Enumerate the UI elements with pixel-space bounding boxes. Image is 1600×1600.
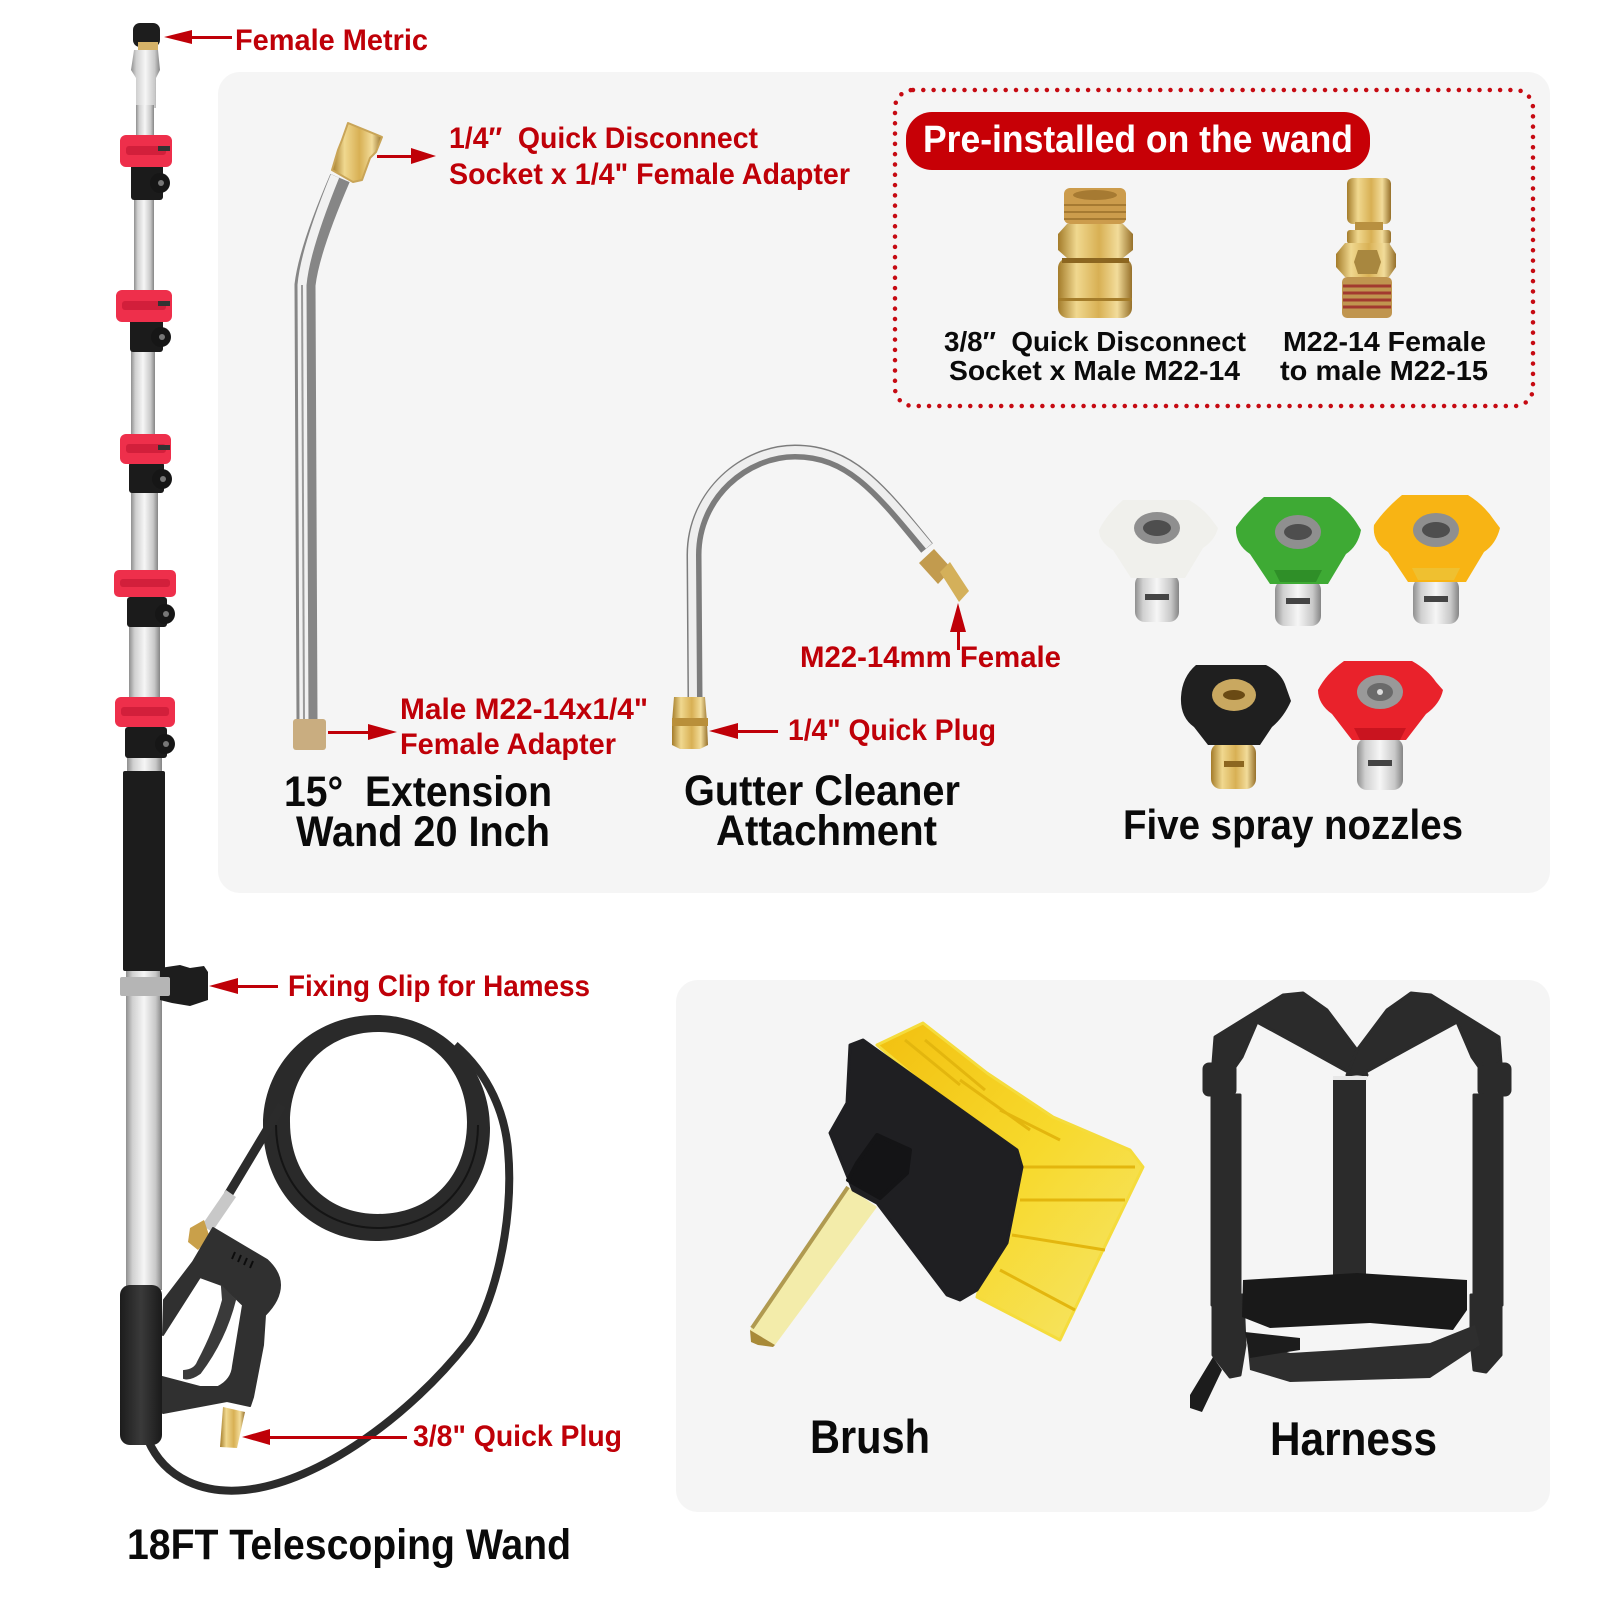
- pill text: Pre-installed on the wand: [923, 119, 1353, 161]
- rod: [305, 178, 340, 720]
- clamp 2: [116, 290, 172, 352]
- brass socket: [672, 697, 708, 749]
- right side: [1347, 993, 1510, 1372]
- rod: [750, 1187, 877, 1345]
- belt buckle: [1245, 1332, 1300, 1358]
- clamp 3: [120, 434, 172, 493]
- centre ring: [1333, 1076, 1367, 1080]
- bristles: [877, 1023, 1143, 1340]
- label: socket: Socket x Male M22-14: [949, 355, 1240, 386]
- gun vents: [232, 1252, 253, 1268]
- arrow: fixing clip: [209, 978, 278, 994]
- tube sections: [136, 105, 154, 137]
- label: socket: [944, 326, 1246, 386]
- caption: extension wand: [284, 768, 552, 856]
- brass socket: [332, 123, 382, 182]
- clamp 4: [114, 570, 176, 627]
- gun trigger: [184, 1287, 235, 1378]
- brass quick plug: [220, 1407, 245, 1448]
- tube highlight: [692, 450, 929, 698]
- rod centre line: [302, 285, 304, 720]
- clamp 5: [115, 697, 175, 758]
- label: fixing clip: Fixing Clip for Hamess: [288, 970, 590, 1003]
- arrow: female metric: [164, 30, 232, 44]
- label: quarter-inch socket: 1/4″ Quick Disconnect: [449, 122, 758, 155]
- tube: [694, 452, 927, 698]
- hose coil: [263, 1015, 490, 1241]
- caption: gutter cleaner: Attachment: [716, 807, 937, 855]
- coil winding line: [276, 1125, 478, 1228]
- label: quarter-inch socket: Socket x 1/4" Female Adapter: [449, 158, 850, 191]
- left side: [1204, 993, 1367, 1377]
- end fitting: [919, 549, 969, 602]
- caption: gutter cleaner: Gutter Cleaner: [684, 767, 960, 815]
- caption: telescoping wand: 18FT Telescoping Wand: [127, 1521, 571, 1569]
- brass ring: [138, 42, 158, 51]
- hose to gun: [228, 1105, 282, 1195]
- foam grip: [123, 771, 165, 971]
- arrow: quick plug: [709, 723, 778, 739]
- label: plug: M22-14 Female: [1283, 326, 1486, 357]
- caption: extension wand: Wand 20 Inch: [296, 808, 550, 856]
- label: quick plug: 3/8" Quick Plug: [413, 1420, 622, 1453]
- hanging buckle: [1190, 1357, 1222, 1412]
- pill heading: [906, 112, 1370, 170]
- caption: gutter cleaner: [684, 767, 960, 855]
- nozzle: yellow: [1374, 495, 1500, 624]
- caption: extension wand: 15° Extension: [284, 768, 552, 816]
- caption: nozzles: Five spray nozzles: [1123, 801, 1463, 848]
- nozzle: black: [1181, 665, 1291, 789]
- hose long loop: [148, 1045, 509, 1491]
- panel: brush and harness: [676, 980, 1550, 1512]
- dotted border: [895, 90, 1533, 406]
- gun swivel fitting: [202, 1190, 236, 1232]
- spray gun body: [162, 1228, 280, 1413]
- brush: [750, 1023, 1143, 1347]
- label: plug: [1280, 326, 1488, 386]
- label: m22 female: M22-14mm Female: [800, 641, 1061, 674]
- silver band: [120, 977, 170, 996]
- top knob: [133, 23, 160, 47]
- fitting: quick disconnect socket: [1058, 188, 1133, 318]
- label: male adapter: Female Adapter: [400, 728, 616, 761]
- bottom grip: [120, 1285, 162, 1445]
- label: socket: 3/8″ Quick Disconnect: [944, 326, 1246, 357]
- rod highlight: [302, 176, 335, 720]
- clamp 1: [120, 135, 172, 200]
- gun brass inlet: [188, 1220, 210, 1250]
- nozzle: white: [1099, 500, 1218, 622]
- bristle shading: [905, 1040, 1135, 1310]
- nozzle: red: [1318, 661, 1443, 790]
- gutter cleaner: [672, 450, 969, 749]
- extension wand: [293, 123, 382, 750]
- arrow: m22 female: [950, 603, 966, 650]
- telescoping wand: [114, 23, 509, 1491]
- pre-installed box: [895, 90, 1533, 406]
- fitting: male plug: [1336, 178, 1396, 318]
- panel: accessories: [218, 72, 1550, 893]
- nozzle: green: [1236, 497, 1361, 626]
- label: quick plug: 1/4" Quick Plug: [788, 714, 996, 747]
- caption: brush: Brush: [810, 1410, 930, 1463]
- caption: harness: Harness: [1270, 1412, 1437, 1465]
- rod tip: [750, 1330, 775, 1347]
- label: plug: to male M22-15: [1280, 355, 1488, 386]
- label: male adapter: Male M22-14x1/4": [400, 693, 648, 726]
- harness clip bracket: [160, 965, 208, 1006]
- backing plate: [830, 1040, 1022, 1300]
- waist belt: [1247, 1325, 1480, 1382]
- label: female metric: Female Metric: [235, 24, 428, 57]
- rod edge: [752, 1187, 848, 1328]
- silver fitting: [131, 50, 160, 108]
- label: quarter-inch socket: [449, 122, 850, 191]
- arrow: quarter-inch socket: [377, 148, 436, 164]
- label: male adapter: [400, 693, 648, 761]
- waist pad: [1242, 1273, 1467, 1330]
- arrow: quick plug: [242, 1429, 407, 1445]
- centre strap: [1333, 1078, 1366, 1276]
- harness: [1190, 993, 1510, 1412]
- socket: [848, 1135, 910, 1198]
- brass adapter: [293, 719, 326, 750]
- arrow: male adapter: [328, 724, 397, 740]
